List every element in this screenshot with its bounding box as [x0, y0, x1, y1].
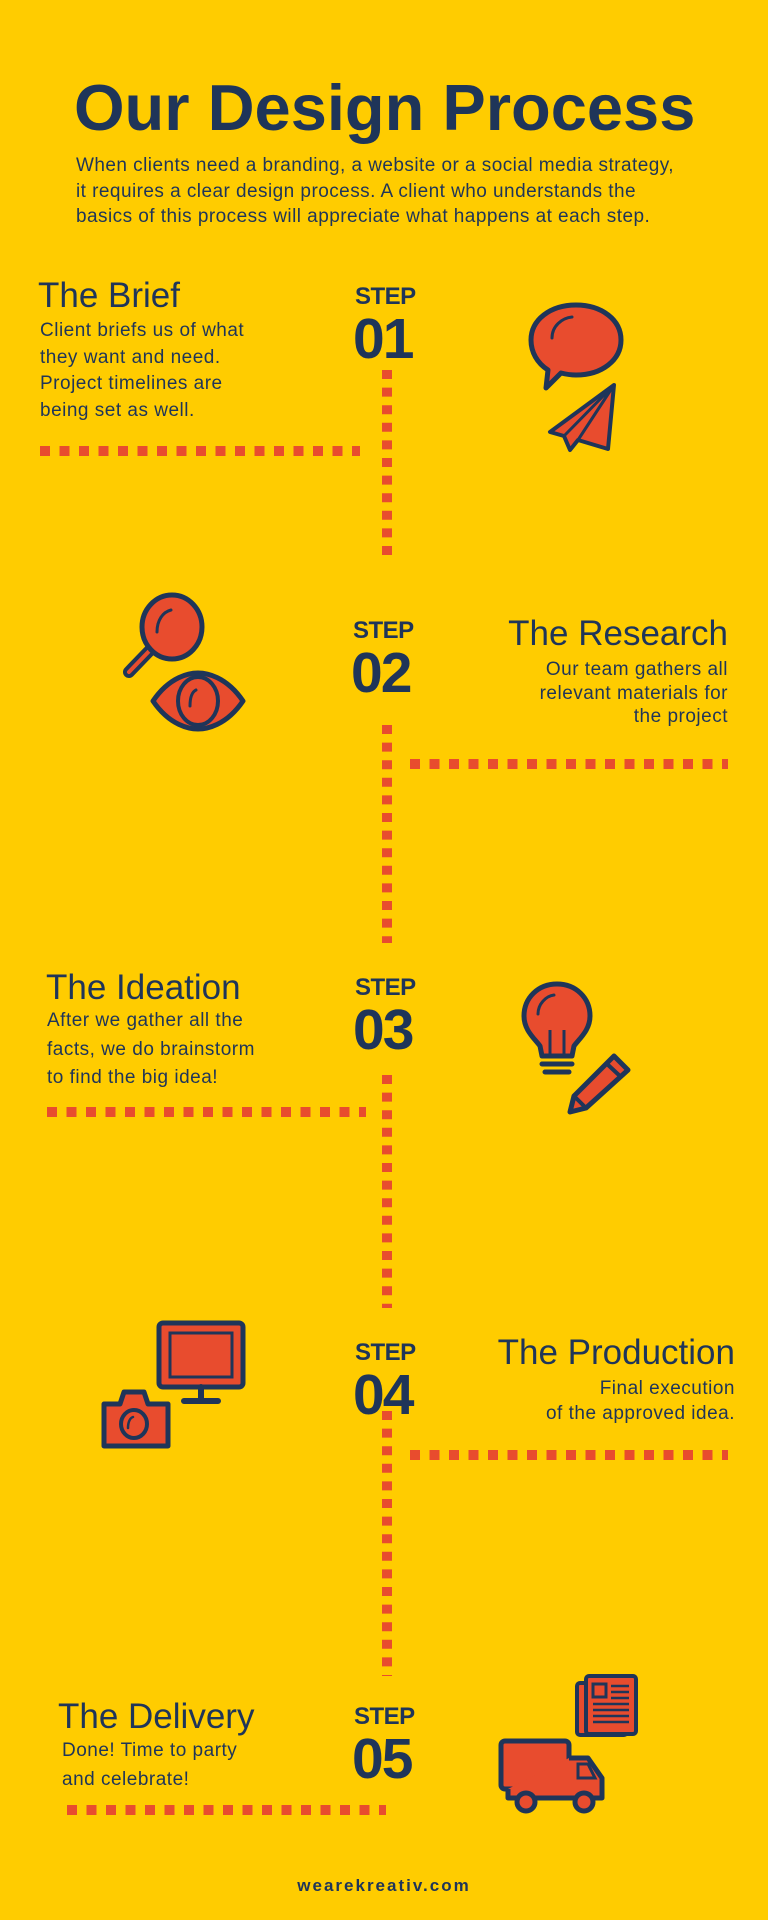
step number 01: STEP — [355, 283, 416, 310]
text: research description: Our team gathers all — [546, 659, 728, 680]
icon: magnifier — [123, 592, 204, 678]
step 3: the ideation — [46, 968, 416, 1088]
icon: speech bubble — [528, 302, 624, 390]
intro text: it requires a clear design process. A client who understands the — [76, 180, 636, 202]
text: ideation description: facts, we do brainstorm — [47, 1038, 255, 1060]
step number 02: STEP — [353, 617, 414, 644]
icon: camera — [102, 1390, 170, 1448]
heading: The Ideation: The Ideation — [46, 968, 241, 1007]
step 1: the brief — [38, 276, 416, 420]
intro text: basics of this process will appreciate what happens at each step. — [76, 206, 650, 227]
icon: paper plane — [548, 383, 616, 452]
step 4: the production — [353, 1333, 735, 1427]
text: ideation description: After we gather all the — [47, 1010, 243, 1031]
text: brief description: Project timelines are — [40, 373, 223, 394]
text: research description: relevant materials for — [540, 682, 728, 704]
intro text — [76, 155, 674, 227]
heading: The Research: The Research — [508, 614, 728, 653]
icon: pencil — [568, 1054, 630, 1114]
step number 03: STEP — [355, 974, 416, 1001]
text: brief description: being set as well. — [40, 400, 195, 420]
icon: newspaper — [575, 1674, 638, 1737]
heading: The Delivery: The Delivery — [58, 1697, 254, 1736]
step number 04 — [353, 1339, 416, 1427]
text: production description: of the approved idea. — [546, 1403, 735, 1424]
text: delivery description: Done! Time to party — [62, 1740, 237, 1761]
text: brief description: they want and need. — [40, 346, 221, 368]
step number 01 — [353, 283, 416, 371]
text: production description — [546, 1378, 735, 1424]
step number 02 — [351, 617, 414, 705]
step 5: the delivery — [58, 1697, 415, 1791]
text: research description — [540, 659, 728, 727]
step number 01: 01 — [353, 307, 412, 371]
text: production description: Final execution — [600, 1378, 735, 1399]
step number 05 — [352, 1703, 415, 1791]
text: ideation description — [47, 1010, 255, 1088]
step number 04: 04 — [353, 1363, 412, 1427]
title: Our Design Process — [74, 71, 695, 144]
heading: The Production: The Production — [498, 1333, 735, 1372]
intro text: When clients need a branding, a website or a social media strategy, — [76, 155, 674, 176]
step number 03 — [353, 974, 416, 1062]
step number 05: STEP — [354, 1703, 415, 1730]
text: research description: the project — [634, 706, 728, 727]
step number 02: 02 — [351, 641, 410, 705]
step 2: the research — [351, 614, 728, 727]
text: brief description: Client briefs us of what — [40, 320, 244, 341]
footer: website: wearekreativ.com — [297, 1876, 471, 1895]
text: ideation description: to find the big idea! — [47, 1067, 218, 1088]
step number 05: 05 — [352, 1727, 411, 1791]
icon: monitor — [156, 1320, 246, 1404]
text: delivery description — [62, 1740, 237, 1790]
text: delivery description: and celebrate! — [62, 1769, 189, 1790]
icon: delivery truck — [498, 1738, 604, 1814]
icon: eye — [150, 670, 246, 732]
icon: light bulb — [522, 982, 592, 1074]
step number 04: STEP — [355, 1339, 416, 1366]
text: brief description — [40, 320, 244, 420]
step number 03: 03 — [353, 998, 412, 1062]
heading: The Brief: The Brief — [38, 276, 180, 315]
